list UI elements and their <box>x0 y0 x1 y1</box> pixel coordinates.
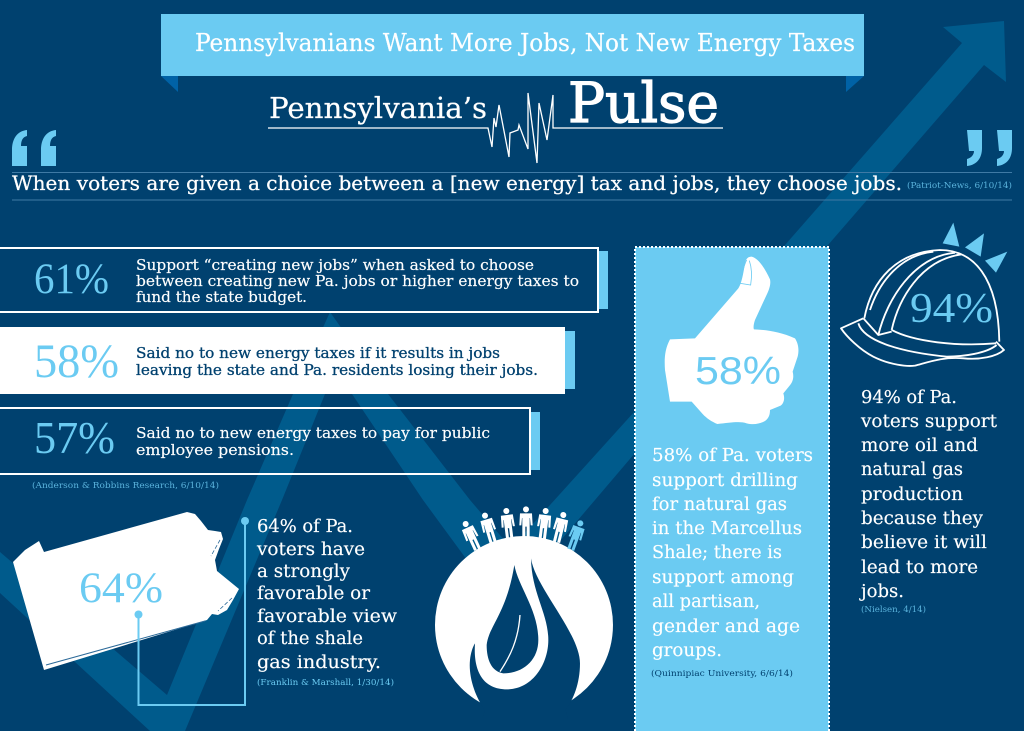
hat description: believe it will <box>861 533 987 553</box>
description: Said no to new energy taxes if it results in jobs <box>136 346 500 362</box>
hat description: more oil and <box>861 436 978 456</box>
panel description <box>652 446 813 661</box>
map description: a strongly <box>257 562 350 582</box>
panel description: in the Marcellus <box>652 519 802 539</box>
leader dot bottom <box>134 610 142 618</box>
banner <box>161 14 864 92</box>
panel description: gender and age <box>652 617 800 637</box>
opening quote mark <box>12 130 56 166</box>
panel: thumbs up <box>635 247 829 731</box>
hat outline <box>841 250 1004 366</box>
accent bar <box>530 412 540 470</box>
panel description: Shale; there is <box>652 543 782 563</box>
pulse line <box>268 93 723 163</box>
hat description: 94% of Pa. <box>861 388 957 408</box>
map description: voters have <box>256 540 365 560</box>
accent bar <box>565 331 575 389</box>
outlined box <box>0 248 598 312</box>
panel background <box>635 247 829 731</box>
panel description: for natural gas <box>652 495 787 515</box>
icon: hard hat <box>841 223 1007 366</box>
description: Support “creating new jobs” when asked to choose <box>136 258 534 274</box>
source: Quinnipiac: (Quinnipiac University, 6/6/14) <box>651 668 793 679</box>
logo word large: Pulse <box>568 71 719 135</box>
outlined box <box>0 408 530 474</box>
map description <box>256 517 397 673</box>
hat percent: 94% <box>910 286 993 332</box>
panel description: support drilling <box>652 471 798 491</box>
logo word: Pennsylvania’s <box>269 91 487 125</box>
hat description: production <box>861 485 963 505</box>
flame cut-out <box>470 558 580 720</box>
map description: favorable view <box>257 607 397 627</box>
logo: Pennsylvania's Pulse <box>268 71 723 163</box>
leaf vein <box>500 615 520 672</box>
stat row: 61% <box>0 248 608 312</box>
stat row: 58% <box>0 327 575 394</box>
percent: 61% <box>34 256 109 303</box>
banner heading: Pennsylvanians Want More Jobs, Not New Energy Taxes <box>195 29 855 57</box>
source: Franklin & Marshall: (Franklin & Marshall, 1/30/14) <box>257 677 394 688</box>
Pennsylvania map panel <box>13 512 397 705</box>
panel description: support among <box>652 568 794 588</box>
leader dot top <box>241 517 249 525</box>
hat description: lead to more <box>861 558 978 578</box>
quote text: When voters are given a choice between a [new energy] tax and jobs, they choose jobs. <box>12 171 902 195</box>
accent bar <box>598 251 608 309</box>
banner right fold <box>846 76 864 92</box>
white circle <box>435 536 613 714</box>
map percent: 64% <box>79 565 163 612</box>
thumb percent: 58% <box>695 350 781 393</box>
map description: gas industry. <box>257 653 381 673</box>
source: Nielsen: (Nielsen, 4/14) <box>861 604 926 615</box>
description: between creating new Pa. jobs or higher energy taxes to <box>136 274 579 290</box>
description <box>136 426 490 459</box>
closing quote mark <box>967 130 1012 166</box>
panel description: 58% of Pa. voters <box>652 446 813 466</box>
map of Pennsylvania <box>13 512 239 670</box>
hat description: jobs. <box>859 582 904 602</box>
source: Anderson & Robbins: (Anderson & Robbins Research, 6/10/14) <box>32 480 219 491</box>
icon: gas flame with people <box>435 506 613 720</box>
percent: 57% <box>34 413 115 463</box>
quote block <box>12 130 1012 200</box>
hat sparks <box>943 223 1007 273</box>
people row <box>458 506 588 552</box>
description <box>136 258 579 306</box>
panel description: all partisan, <box>652 592 760 612</box>
map description: 64% of Pa. <box>257 517 353 537</box>
description: leaving the state and Pa. residents losing their jobs. <box>136 363 538 379</box>
percent: 58% <box>34 335 119 388</box>
banner ribbon <box>161 14 864 76</box>
hat description <box>859 388 997 602</box>
teardrop <box>487 565 538 673</box>
description: Said no to new energy taxes to pay for public <box>136 426 490 442</box>
hat description: voters support <box>860 412 997 432</box>
map description: favorable or <box>257 584 371 604</box>
stat row: 57% <box>0 408 540 474</box>
quote source: (Patriot-News, 6/10/14) <box>907 180 1012 191</box>
white box <box>0 327 565 394</box>
description <box>136 346 538 379</box>
description: fund the state budget. <box>136 290 307 306</box>
map description: of the shale <box>257 629 363 649</box>
leader line <box>138 521 245 705</box>
banner left fold <box>161 76 178 92</box>
panel description: groups. <box>652 641 722 661</box>
hat description: because they <box>861 509 983 529</box>
description: employee pensions. <box>136 443 294 459</box>
icon: thumbs up <box>665 257 798 424</box>
hat description: natural gas <box>861 460 963 480</box>
